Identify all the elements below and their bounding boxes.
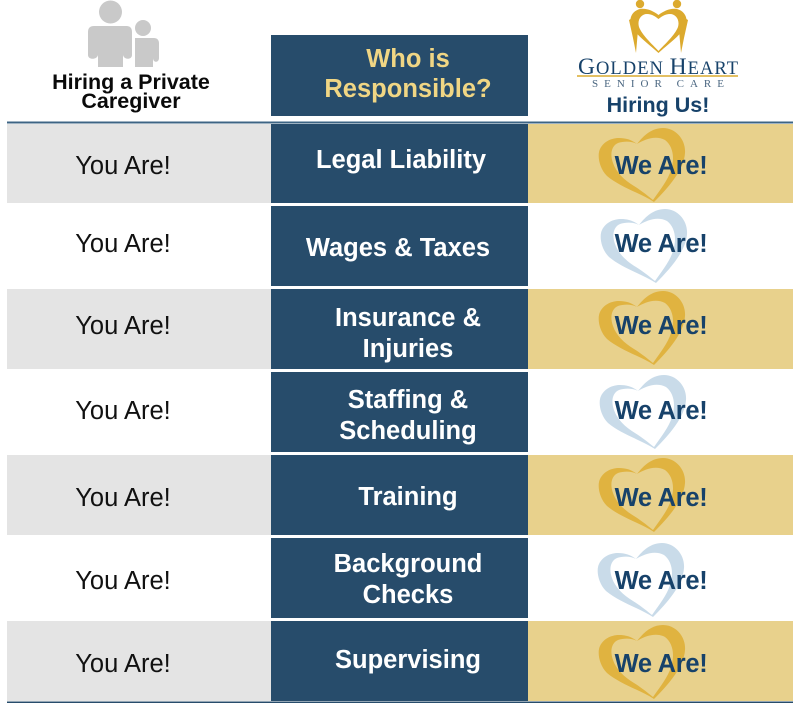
row: background checks: You Are! — [75, 567, 171, 595]
row: training: Training — [358, 483, 458, 511]
logo: golden heart senior care: GOLDEN HEART — [578, 54, 738, 80]
row: legal liability: You Are! — [75, 152, 171, 180]
row: wages and taxes — [75, 206, 707, 286]
row: supervising — [7, 621, 793, 701]
row: staffing and scheduling — [75, 372, 707, 452]
row: insurance and injuries: Injuries — [363, 335, 453, 363]
row: staffing and scheduling: Staffing & — [348, 386, 468, 414]
row: training: You Are! — [75, 484, 171, 512]
row: wages and taxes: You Are! — [75, 230, 171, 258]
heading: hiring us: Hiring Us! — [607, 93, 709, 117]
heading: caregiver line: Caregiver — [81, 89, 181, 113]
row: background checks: Checks — [363, 581, 453, 609]
row: supervising: You Are! — [75, 650, 171, 678]
row: wages and taxes: Wages & Taxes — [306, 234, 490, 262]
row: training — [7, 455, 793, 535]
row: staffing and scheduling: We Are! — [615, 397, 707, 425]
icon: private caregiver adult and child — [88, 0, 159, 67]
panel: who is responsible header: Responsible? — [324, 75, 492, 103]
row: insurance and injuries: Insurance & — [335, 304, 481, 332]
bottom line — [7, 702, 793, 703]
row: staffing and scheduling: You Are! — [75, 397, 171, 425]
row: training: We Are! — [615, 484, 707, 512]
row: legal liability: We Are! — [615, 152, 707, 180]
row: background checks: We Are! — [615, 567, 707, 595]
row: insurance and injuries: You Are! — [75, 312, 171, 340]
logo: golden heart senior care — [577, 0, 738, 90]
row: background checks — [75, 538, 707, 618]
logo: golden heart senior care: SENIOR CARE — [592, 78, 724, 90]
panel: who is responsible header — [271, 35, 528, 116]
row: background checks: Background — [334, 550, 482, 578]
row: legal liability — [7, 124, 793, 203]
row: staffing and scheduling: Scheduling — [339, 417, 477, 445]
row: supervising: We Are! — [615, 650, 707, 678]
row: insurance and injuries: We Are! — [615, 312, 707, 340]
divider line — [7, 122, 793, 124]
row: wages and taxes: We Are! — [615, 230, 707, 258]
row: insurance and injuries — [7, 289, 793, 369]
panel: who is responsible header: Who is — [366, 45, 450, 73]
heading: hiring a private caregiver: Hiring a Private — [52, 70, 210, 94]
row: supervising: Supervising — [335, 646, 481, 674]
row: legal liability: Legal Liability — [316, 146, 487, 174]
